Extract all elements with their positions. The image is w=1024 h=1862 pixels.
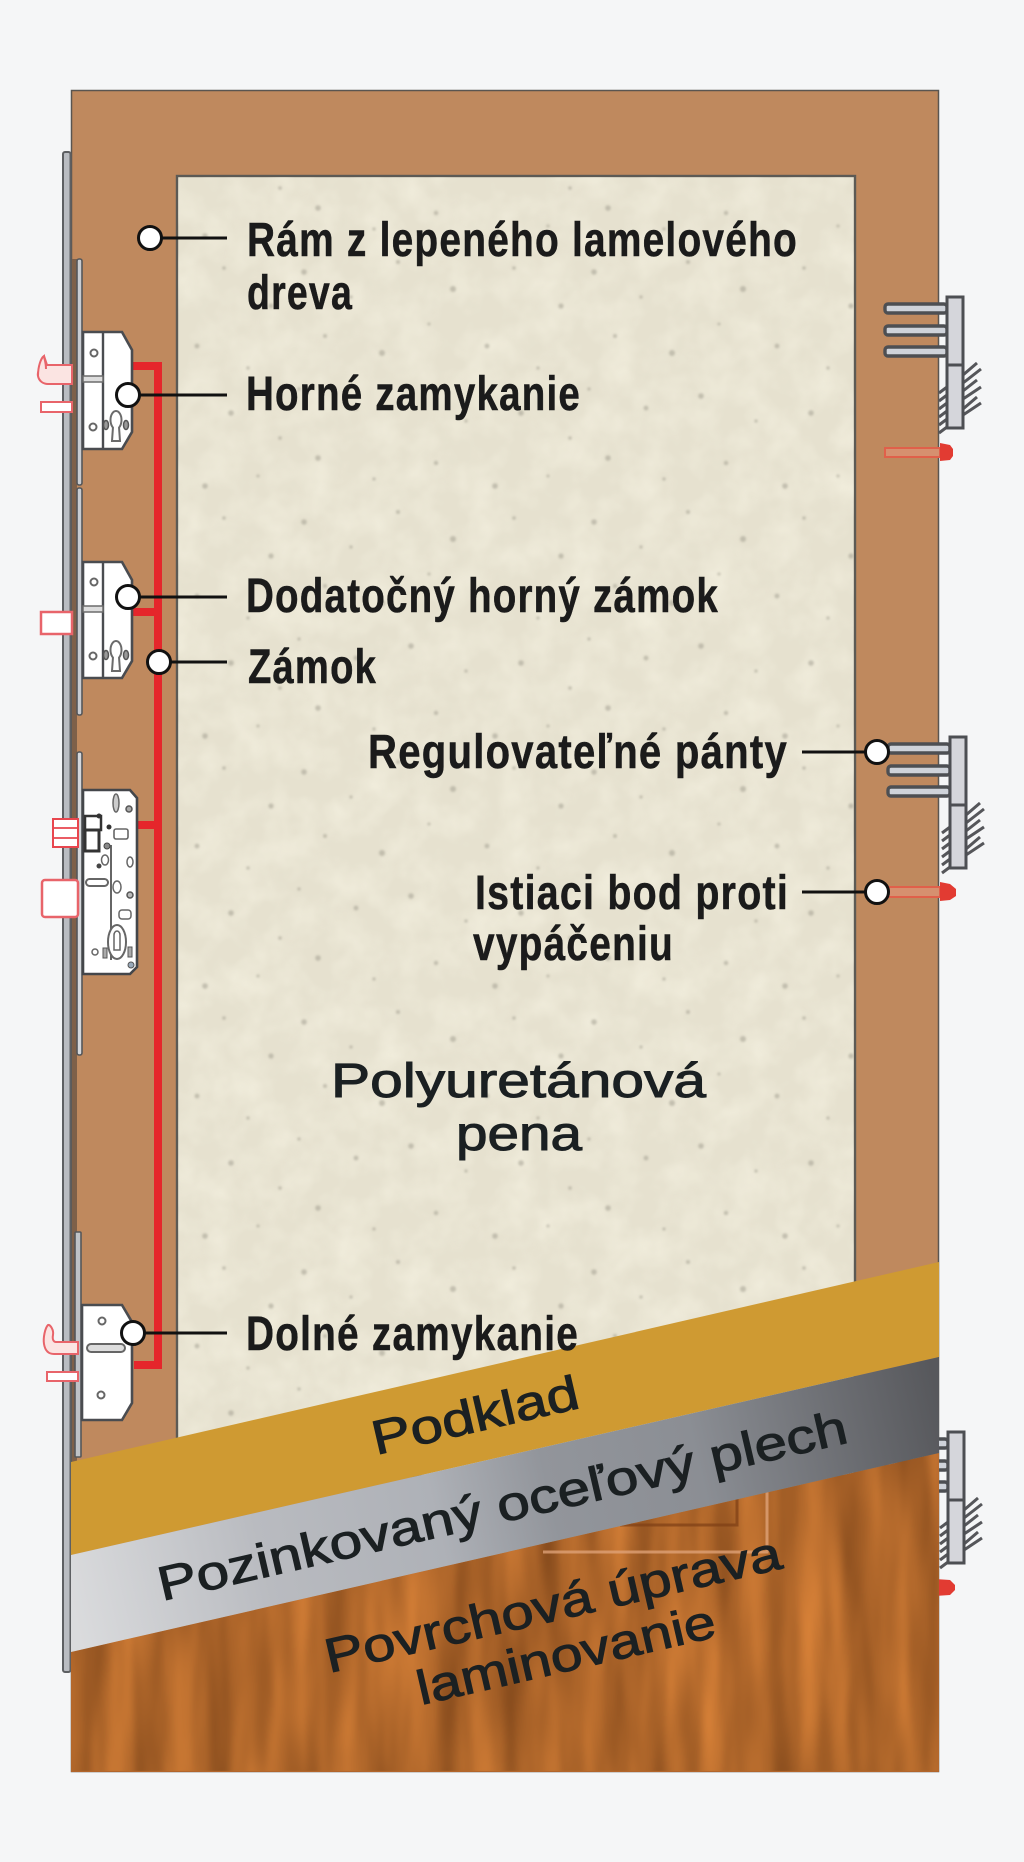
label: upper locking: Horné zamykanie [246, 368, 581, 421]
label: polyurethane foam: Polyuretánová [331, 1055, 706, 1108]
label: surface finish: Povrchová úprava [320, 1527, 787, 1684]
callout: lock leader [148, 650, 227, 674]
callout: additional lock leader [116, 586, 227, 608]
icon: anti-prying pin 3 [935, 1579, 955, 1596]
label: security point line 2: vypáčeniu [473, 918, 674, 971]
callout: lower locking leader [122, 1322, 227, 1344]
callout: frame leader [138, 226, 227, 250]
label: polyurethane foam line 2: pena [456, 1108, 582, 1161]
label: frame: Rám z lepeného lamelového [247, 214, 798, 267]
callout: upper locking leader [116, 384, 227, 406]
icon: adjustable hinge 3 [886, 1432, 982, 1568]
panel: polyurethane foam core [177, 176, 855, 1476]
label: primer: Podklad [367, 1367, 584, 1466]
label: lower locking: Dolné zamykanie [246, 1308, 579, 1361]
band: galvanized steel sheet [71, 1357, 939, 1652]
icon: adjustable hinge 2 [888, 737, 984, 873]
icon: anti-prying pin 2 [885, 882, 956, 901]
icon: lower lock [44, 1305, 132, 1420]
callout: security point leader [802, 880, 888, 904]
label: galvanized steel sheet: Pozinkovaný oceľový plech [153, 1401, 852, 1612]
callout: hinge leader [802, 740, 888, 764]
icon: upper lock [38, 332, 132, 449]
left steel edge plates [63, 152, 82, 1672]
icon: main lock [42, 790, 137, 974]
icon: anti-prying pin 1 [885, 443, 953, 461]
label: frame line 2: dreva [247, 267, 353, 320]
label: lamination: laminovanie [412, 1595, 721, 1716]
label: lock: Zámok [248, 641, 377, 694]
label: additional upper lock: Dodatočný horný zámok [246, 570, 719, 623]
icon: additional upper lock [41, 562, 132, 678]
icon: adjustable hinge 1 [885, 297, 981, 433]
label: adjustable hinges: Regulovateľné pánty [368, 726, 788, 779]
panel: wood laminate surface [71, 1440, 939, 1772]
band: primer [71, 1262, 939, 1555]
label: security point: Istiaci bod proti [475, 867, 789, 920]
door frame: glued laminated wood [72, 90, 938, 1772]
red locking rod [132, 366, 158, 1365]
